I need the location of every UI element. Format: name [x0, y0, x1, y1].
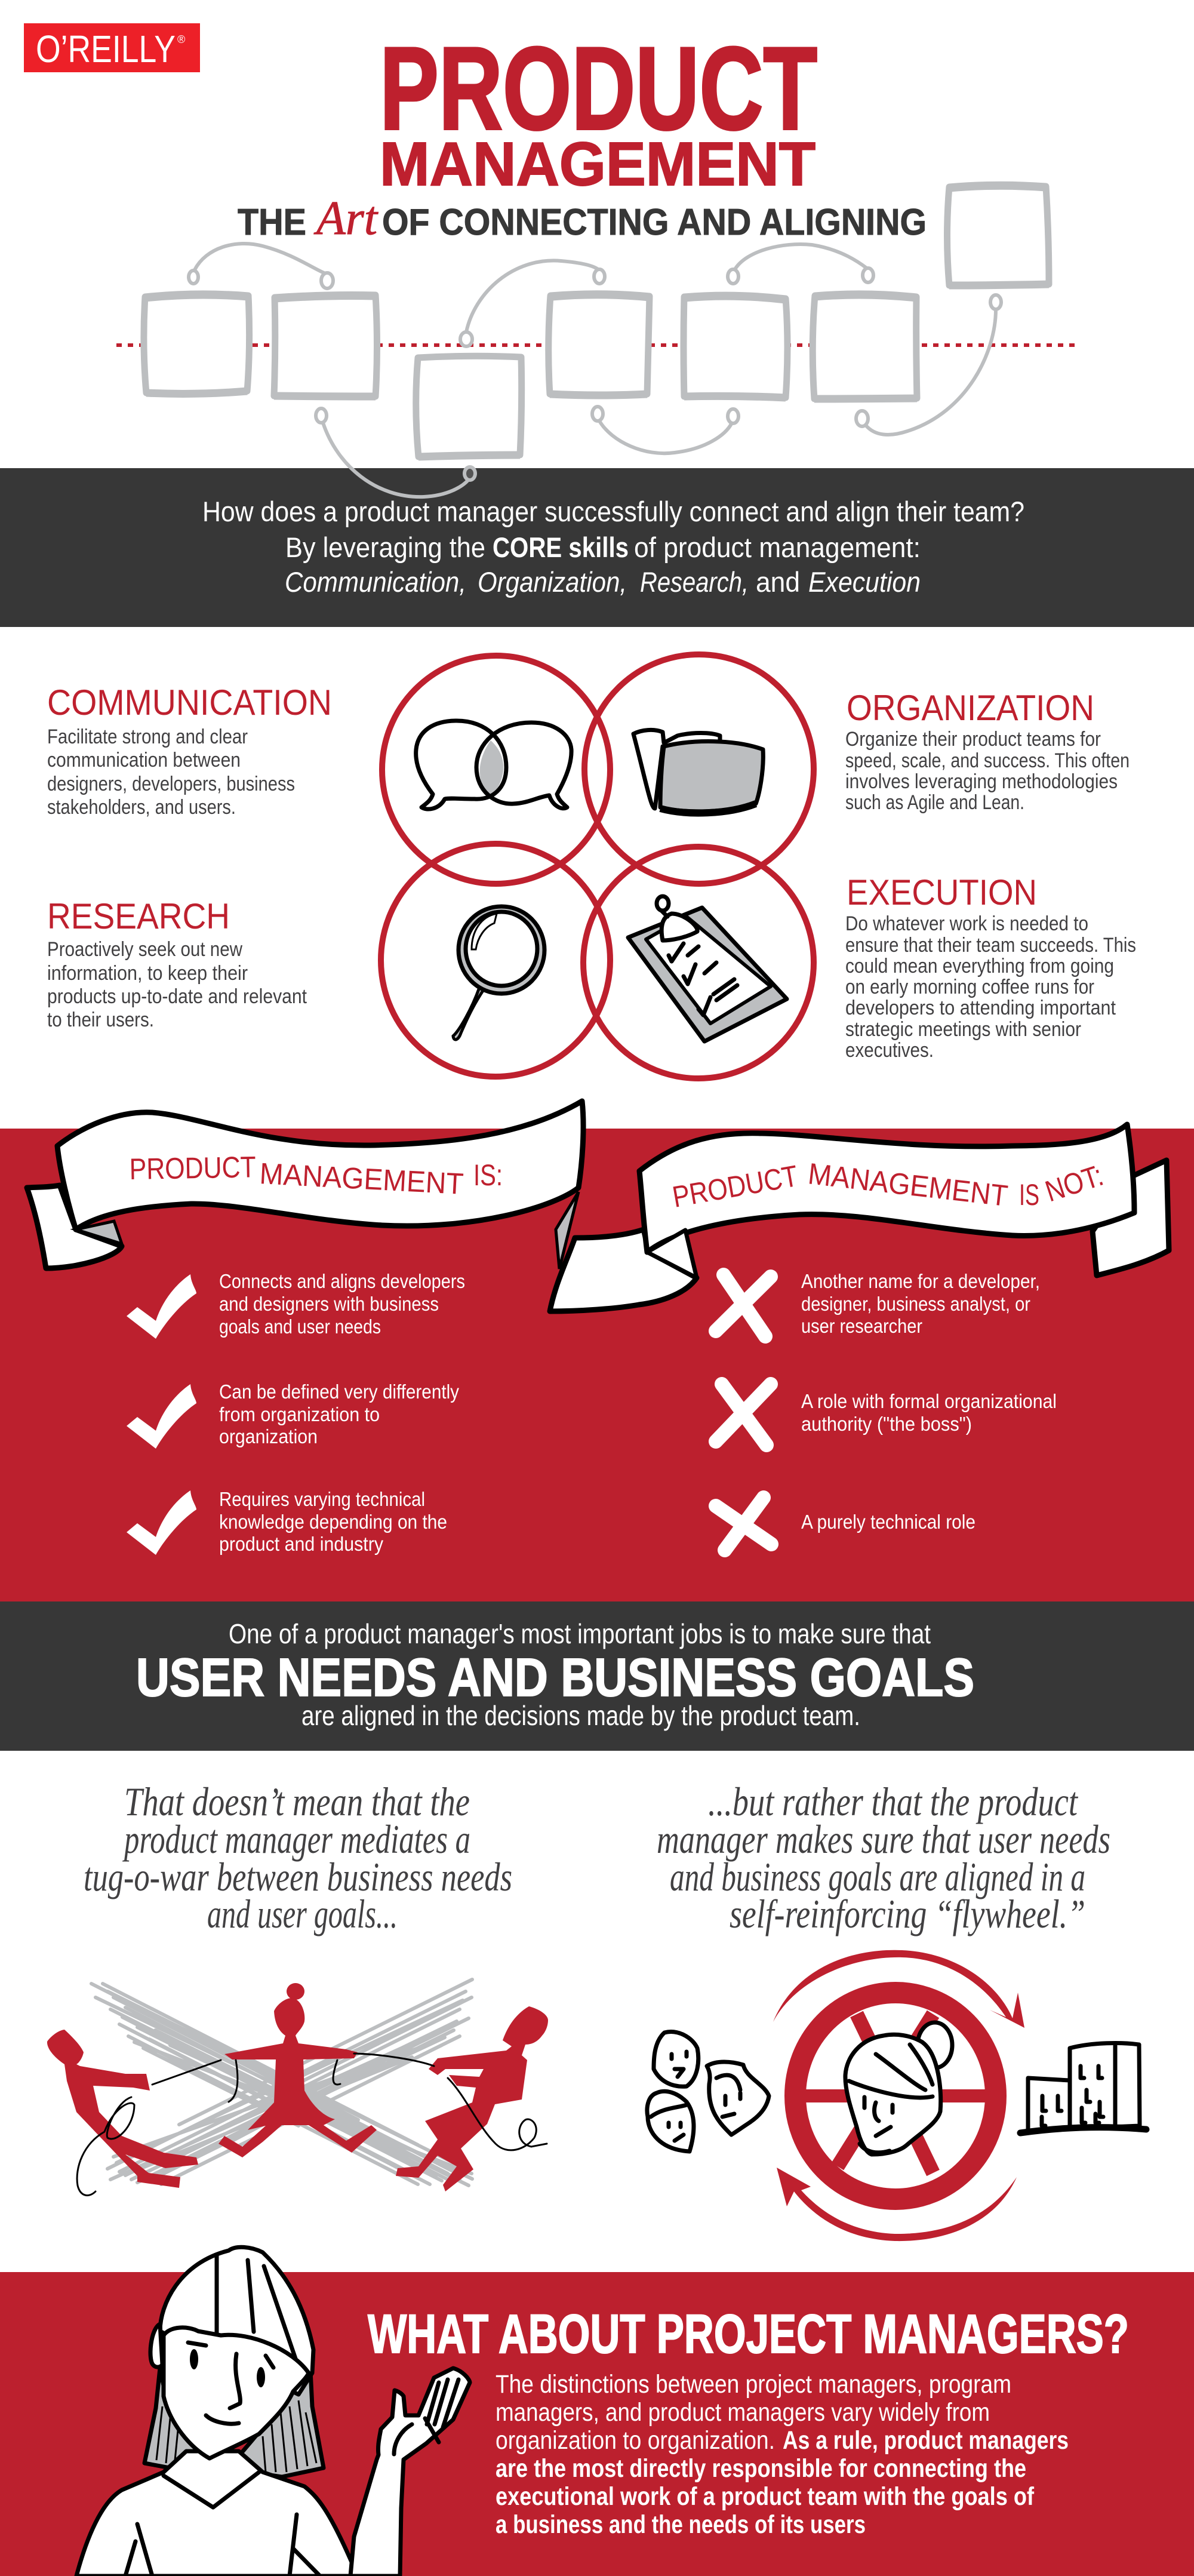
panel: communication text	[47, 683, 332, 819]
text: flywheel quote	[657, 1779, 1110, 1936]
business buildings	[1020, 2043, 1146, 2133]
panel: organization text: speed, scale, and success. This often	[845, 749, 1130, 772]
text: is item one: and designers with business	[219, 1293, 439, 1315]
text: intro question: How does a product manager successfully connect and align their team?	[202, 496, 1024, 527]
user faces	[647, 2032, 769, 2151]
icon: cross two	[716, 1384, 771, 1445]
connector: frames five and six	[728, 244, 873, 284]
panel: organization text: such as Agile and Lean.	[845, 791, 1024, 814]
panel: execution text: strategic meetings with senior	[845, 1018, 1081, 1041]
text: project manager explanation	[496, 2370, 1069, 2539]
hair hatching	[156, 2400, 316, 2472]
panel: research text: RESEARCH	[47, 896, 230, 936]
red wheel	[789, 1993, 1003, 2199]
text: is item one	[219, 1270, 465, 1338]
panel: organization text: ORGANIZATION	[847, 688, 1094, 728]
subtitle: Art	[313, 192, 378, 245]
logo: O'Reilly: ®	[177, 33, 185, 45]
panel: research text: to their users.	[47, 1009, 154, 1031]
panel: execution text: developers to attending important	[845, 997, 1116, 1019]
illustration: tug of war	[47, 1979, 548, 2196]
panel: is and is-not red band	[0, 1129, 1194, 1601]
banner: product management is: IS:	[473, 1158, 503, 1192]
text: is item two: organization	[219, 1425, 318, 1447]
text: is item three	[219, 1488, 447, 1555]
panel: communication text: Facilitate strong and clear	[47, 726, 248, 748]
text: intro question: of product management:	[634, 531, 921, 563]
text: tug-of-war quote	[84, 1779, 512, 1936]
panel: execution text: could mean everything from going	[845, 955, 1114, 977]
text: is item three: knowledge depending on the	[219, 1511, 447, 1533]
subtitle	[238, 192, 927, 245]
icon: check three	[127, 1490, 196, 1555]
panel: research text: Proactively seek out new	[47, 938, 242, 961]
text: is-not item one: designer, business analyst, or	[801, 1293, 1030, 1315]
panel: user needs dark band: are aligned in the decisions made by the product team.	[301, 1700, 860, 1731]
face	[164, 2328, 309, 2458]
banner: product management is	[27, 1101, 583, 1268]
hair dome	[160, 2247, 313, 2394]
text: intro question: Communication,	[285, 566, 466, 598]
panel: intro dark band	[0, 468, 1194, 627]
text: is-not item two: A role with formal organizational	[801, 1390, 1057, 1412]
text: project manager explanation: executional work of a product team with the goals of	[496, 2482, 1035, 2511]
text: intro question: By leveraging the	[285, 531, 485, 563]
panel: research text: information, to keep their	[47, 962, 248, 985]
icon: magnifying glass	[453, 906, 544, 1040]
text: is-not item three: A purely technical role	[801, 1511, 975, 1533]
back hair right	[236, 2371, 324, 2477]
text: project manager explanation: organization to organization.	[496, 2426, 775, 2455]
text: is-not item one: Another name for a developer,	[801, 1270, 1040, 1292]
banner: product management is: MANAGEMENT	[259, 1157, 464, 1201]
text: flywheel quote: self-reinforcing “flywheel.”	[730, 1891, 1085, 1936]
text: project manager explanation: managers, and product managers vary widely from	[496, 2398, 990, 2427]
text: intro question: Research,	[640, 566, 749, 598]
text: is-not item two: authority ("the boss")	[801, 1413, 972, 1435]
panel: execution text: Do whatever work is needed to	[845, 912, 1088, 935]
text: intro question: Execution	[808, 566, 921, 598]
subtitle: THE	[238, 202, 306, 243]
centre figure	[219, 1983, 377, 2157]
text: tug-of-war quote: and user goals...	[207, 1891, 398, 1936]
side hair	[150, 2324, 162, 2367]
banner: product management is not: MANAGEMENT	[807, 1157, 1010, 1213]
text: tug-of-war quote: product manager mediates a	[122, 1816, 470, 1862]
text: tug-of-war quote: tug-o-war between business needs	[84, 1854, 512, 1899]
text: is item one: Connects and aligns developers	[219, 1270, 465, 1292]
illustration: woman waving	[76, 2247, 470, 2576]
woman face	[845, 2022, 952, 2154]
panel: user needs dark band: One of a product manager's most important jobs is to make sure that	[229, 1618, 931, 1649]
text: intro question: CORE skills	[493, 531, 629, 563]
connector: frames one and two	[189, 244, 333, 288]
icon: cross three	[716, 1498, 771, 1550]
connector: frames four and five	[592, 407, 738, 453]
banner: product management is not	[550, 1124, 1169, 1311]
timeline: dashed red line	[116, 343, 1078, 347]
text: intro question: and	[756, 566, 800, 598]
text: is-not item one	[801, 1270, 1040, 1337]
title	[380, 23, 817, 198]
text: flywheel quote: ...but rather that the product	[708, 1779, 1079, 1824]
text: intro question	[202, 496, 1024, 598]
panel: organization text: involves leveraging methodologies	[845, 770, 1118, 793]
panel: research text	[47, 896, 307, 1031]
text: is item two: from organization to	[219, 1403, 380, 1425]
banner: product management is: PRODUCT	[129, 1150, 256, 1186]
panel: execution text: EXECUTION	[847, 872, 1037, 912]
panel: project managers red band	[0, 2272, 1194, 2576]
text: intro question: Organization,	[478, 566, 627, 598]
text: is item three: product and industry	[219, 1533, 383, 1555]
text: is-not item one: user researcher	[801, 1315, 922, 1337]
text: project manager explanation: a business and the needs of its users	[496, 2510, 866, 2539]
text: is item two: Can be defined very differently	[219, 1381, 459, 1403]
icon: folder	[633, 730, 763, 813]
panel: communication text: stakeholders, and users.	[47, 796, 236, 819]
text: is item two	[219, 1381, 459, 1447]
illustration: flywheel	[647, 1950, 1146, 2241]
icon: check one	[127, 1274, 196, 1339]
text: is item one: goals and user needs	[219, 1315, 381, 1338]
panel: user needs dark band	[0, 1601, 1194, 1751]
text: project manager explanation: The distinctions between project managers, program	[496, 2370, 1011, 2399]
banner: product management is not: IS	[1019, 1178, 1039, 1212]
panel: organization text: Organize their product teams for	[845, 728, 1101, 751]
panel: execution text: on early morning coffee runs for	[845, 976, 1094, 998]
subtitle: OF CONNECTING AND ALIGNING	[382, 202, 927, 243]
diagram: four overlapping circles	[381, 654, 814, 1078]
panel: execution text: ensure that their team succeeds. This	[845, 934, 1136, 957]
icon: speech bubbles	[416, 721, 571, 809]
icon: cross one	[716, 1275, 771, 1336]
text: is item three: Requires varying technical	[219, 1488, 425, 1510]
torso	[76, 2451, 358, 2576]
connector: frames three and four	[460, 260, 605, 346]
text: is-not item two	[801, 1390, 1057, 1435]
right figure	[396, 2006, 548, 2191]
connector: frames six and seven	[856, 295, 1001, 435]
panel: research text: products up-to-date and relevant	[47, 985, 307, 1008]
panel: organization text	[845, 688, 1130, 814]
logo: O'Reilly: O’REILLY	[36, 27, 176, 70]
icon: clipboard with checklist	[628, 896, 787, 1041]
diagram: connected frames	[144, 185, 1049, 497]
top rotation arrow	[773, 1950, 1024, 2028]
panel: communication text: designers, developers, business	[47, 773, 295, 795]
banner: product management is not: NOT:	[1041, 1158, 1107, 1208]
panel: communication text: communication between	[47, 749, 241, 771]
bottom rotation arrow	[777, 2168, 1017, 2241]
banner: product management is not: PRODUCT	[670, 1159, 801, 1214]
text: tug-of-war quote: That doesn’t mean that the	[124, 1779, 470, 1824]
panel: execution text: executives.	[845, 1039, 934, 1062]
left figure	[47, 2030, 198, 2188]
raised arm and hand	[350, 2368, 470, 2576]
panel: execution text	[845, 872, 1136, 1062]
scribbled grey X	[91, 1979, 472, 2185]
panel: communication text: COMMUNICATION	[47, 683, 332, 723]
panel: user needs dark band: USER NEEDS AND BUSINESS GOALS	[136, 1648, 974, 1708]
title: PRODUCT	[380, 23, 817, 154]
back hair left	[144, 2368, 197, 2470]
text: project manager explanation: are the most directly responsible for connecting the	[496, 2454, 1026, 2483]
connector: frames two and three	[316, 408, 475, 497]
text: project manager explanation: As a rule, product managers	[783, 2426, 1069, 2455]
title: MANAGEMENT	[380, 130, 816, 198]
ropes	[77, 2054, 547, 2196]
icon: check two	[127, 1384, 196, 1449]
